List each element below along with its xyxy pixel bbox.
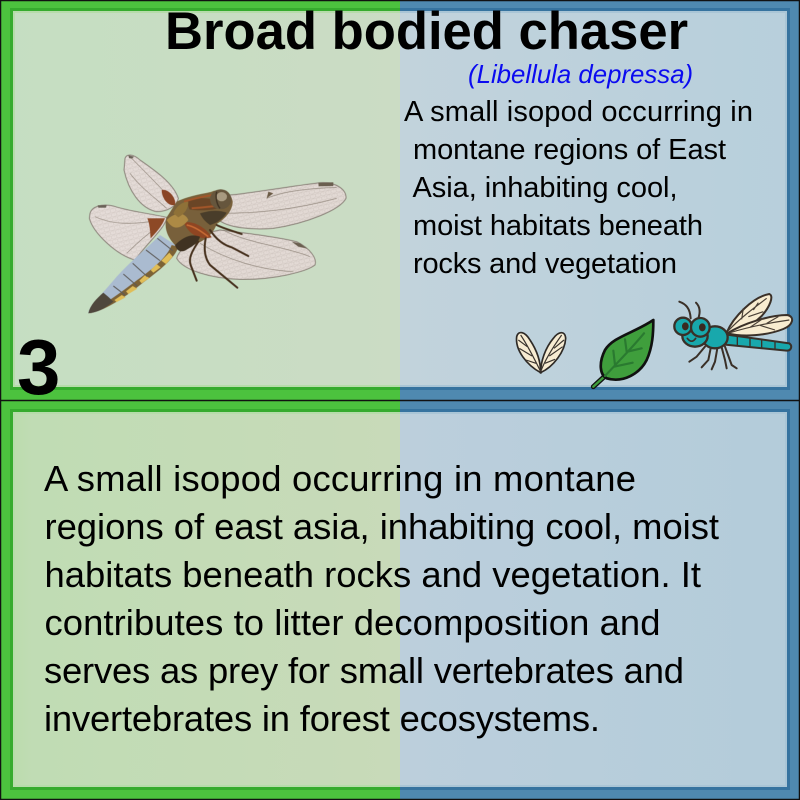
species name: (Libellula depressa) [468,61,693,89]
legs [190,225,248,288]
description text block: serves as prey for small vertebrates and [44,650,684,691]
description text block: contributes to litter decomposition and [44,602,660,643]
summary text block: montane regions of East [413,134,726,166]
icon: green leaf [593,320,653,387]
description text block: invertebrates in forest ecosystems. [44,698,600,739]
description text block: habitats beneath rocks and vegetation. It [44,554,701,595]
summary text block: moist habitats beneath [413,210,703,242]
description text block: A small isopod occurring in montane [44,458,636,499]
summary text block [404,96,753,280]
icon: pair of wings [517,333,566,373]
description text block: regions of east asia, inhabiting cool, moist [44,506,719,547]
title: Broad bodied chaser [165,2,688,61]
abdomen [88,235,178,313]
card number: 3 [17,323,60,411]
panel: bottom card [0,401,800,800]
icon: cartoon dragonfly [674,294,792,369]
panel: top card [0,0,800,400]
wing bases [162,190,175,205]
photo: dragonfly [88,155,346,313]
summary text block: Asia, inhabiting cool, [412,172,678,204]
thorax and head [166,190,233,249]
summary text block: A small isopod occurring in [404,96,753,128]
summary text block: rocks and vegetation [413,248,677,280]
description text block [44,458,719,739]
